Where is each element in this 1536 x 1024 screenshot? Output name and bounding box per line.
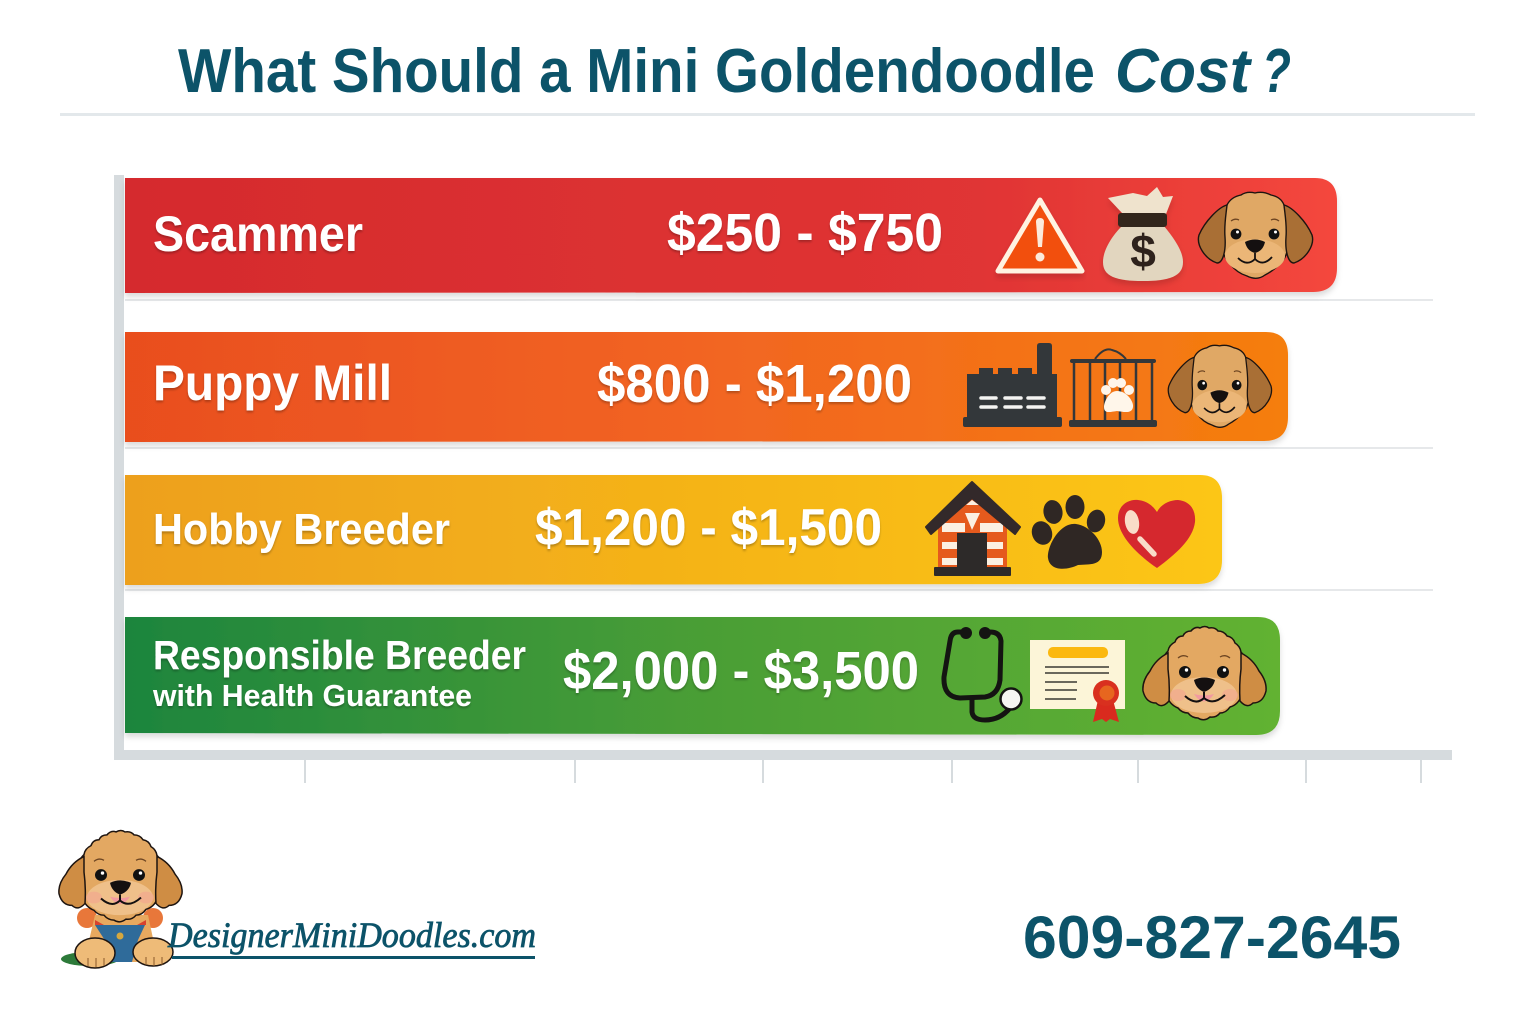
icon: stethoscope [944, 627, 1022, 720]
panel: responsible breeder bar [125, 617, 1280, 735]
icon: certificate [1030, 640, 1125, 722]
logo [59, 830, 536, 968]
icon: dog house [926, 482, 1020, 576]
logo dog [59, 830, 182, 968]
hobby breeder price: $1,200 - $1,500 [535, 499, 882, 557]
panel: hobby breeder bar [125, 475, 1222, 585]
chart axes [114, 175, 1452, 783]
puppy mill price: $800 - $1,200 [597, 354, 912, 414]
panel: puppy mill bar [125, 332, 1288, 442]
responsible breeder label [152, 632, 526, 713]
icon: paw print [1028, 495, 1108, 569]
responsible breeder label: Responsible Breeder [153, 632, 526, 678]
scammer label: Scammer [153, 206, 363, 262]
responsible breeder label: with Health Guarantee [152, 678, 472, 713]
icon: dog face [1143, 626, 1266, 720]
title: Cost [1115, 37, 1252, 106]
responsible breeder price: $2,000 - $3,500 [563, 641, 919, 701]
icon: money bag: $ [1130, 225, 1156, 277]
icon: money bag [1103, 187, 1183, 281]
icon: cage with paw [1069, 349, 1157, 427]
icon: factory [963, 343, 1062, 427]
puppy mill label: Puppy Mill [153, 355, 392, 411]
icon: dog face [1198, 192, 1313, 278]
panel: scammer bar [125, 178, 1337, 293]
logo wordmark: DesignerMiniDoodles.com [167, 915, 536, 955]
title: ? [1262, 37, 1291, 106]
icon: warning triangle [998, 200, 1082, 271]
hobby breeder label: Hobby Breeder [153, 505, 450, 554]
icon: heart [1118, 500, 1195, 568]
icon: dog face [1168, 345, 1272, 427]
phone number: 609-827-2645 [1023, 904, 1401, 971]
title: What Should a Mini Goldendoodle [178, 37, 1095, 106]
scammer price: $250 - $750 [667, 203, 943, 263]
